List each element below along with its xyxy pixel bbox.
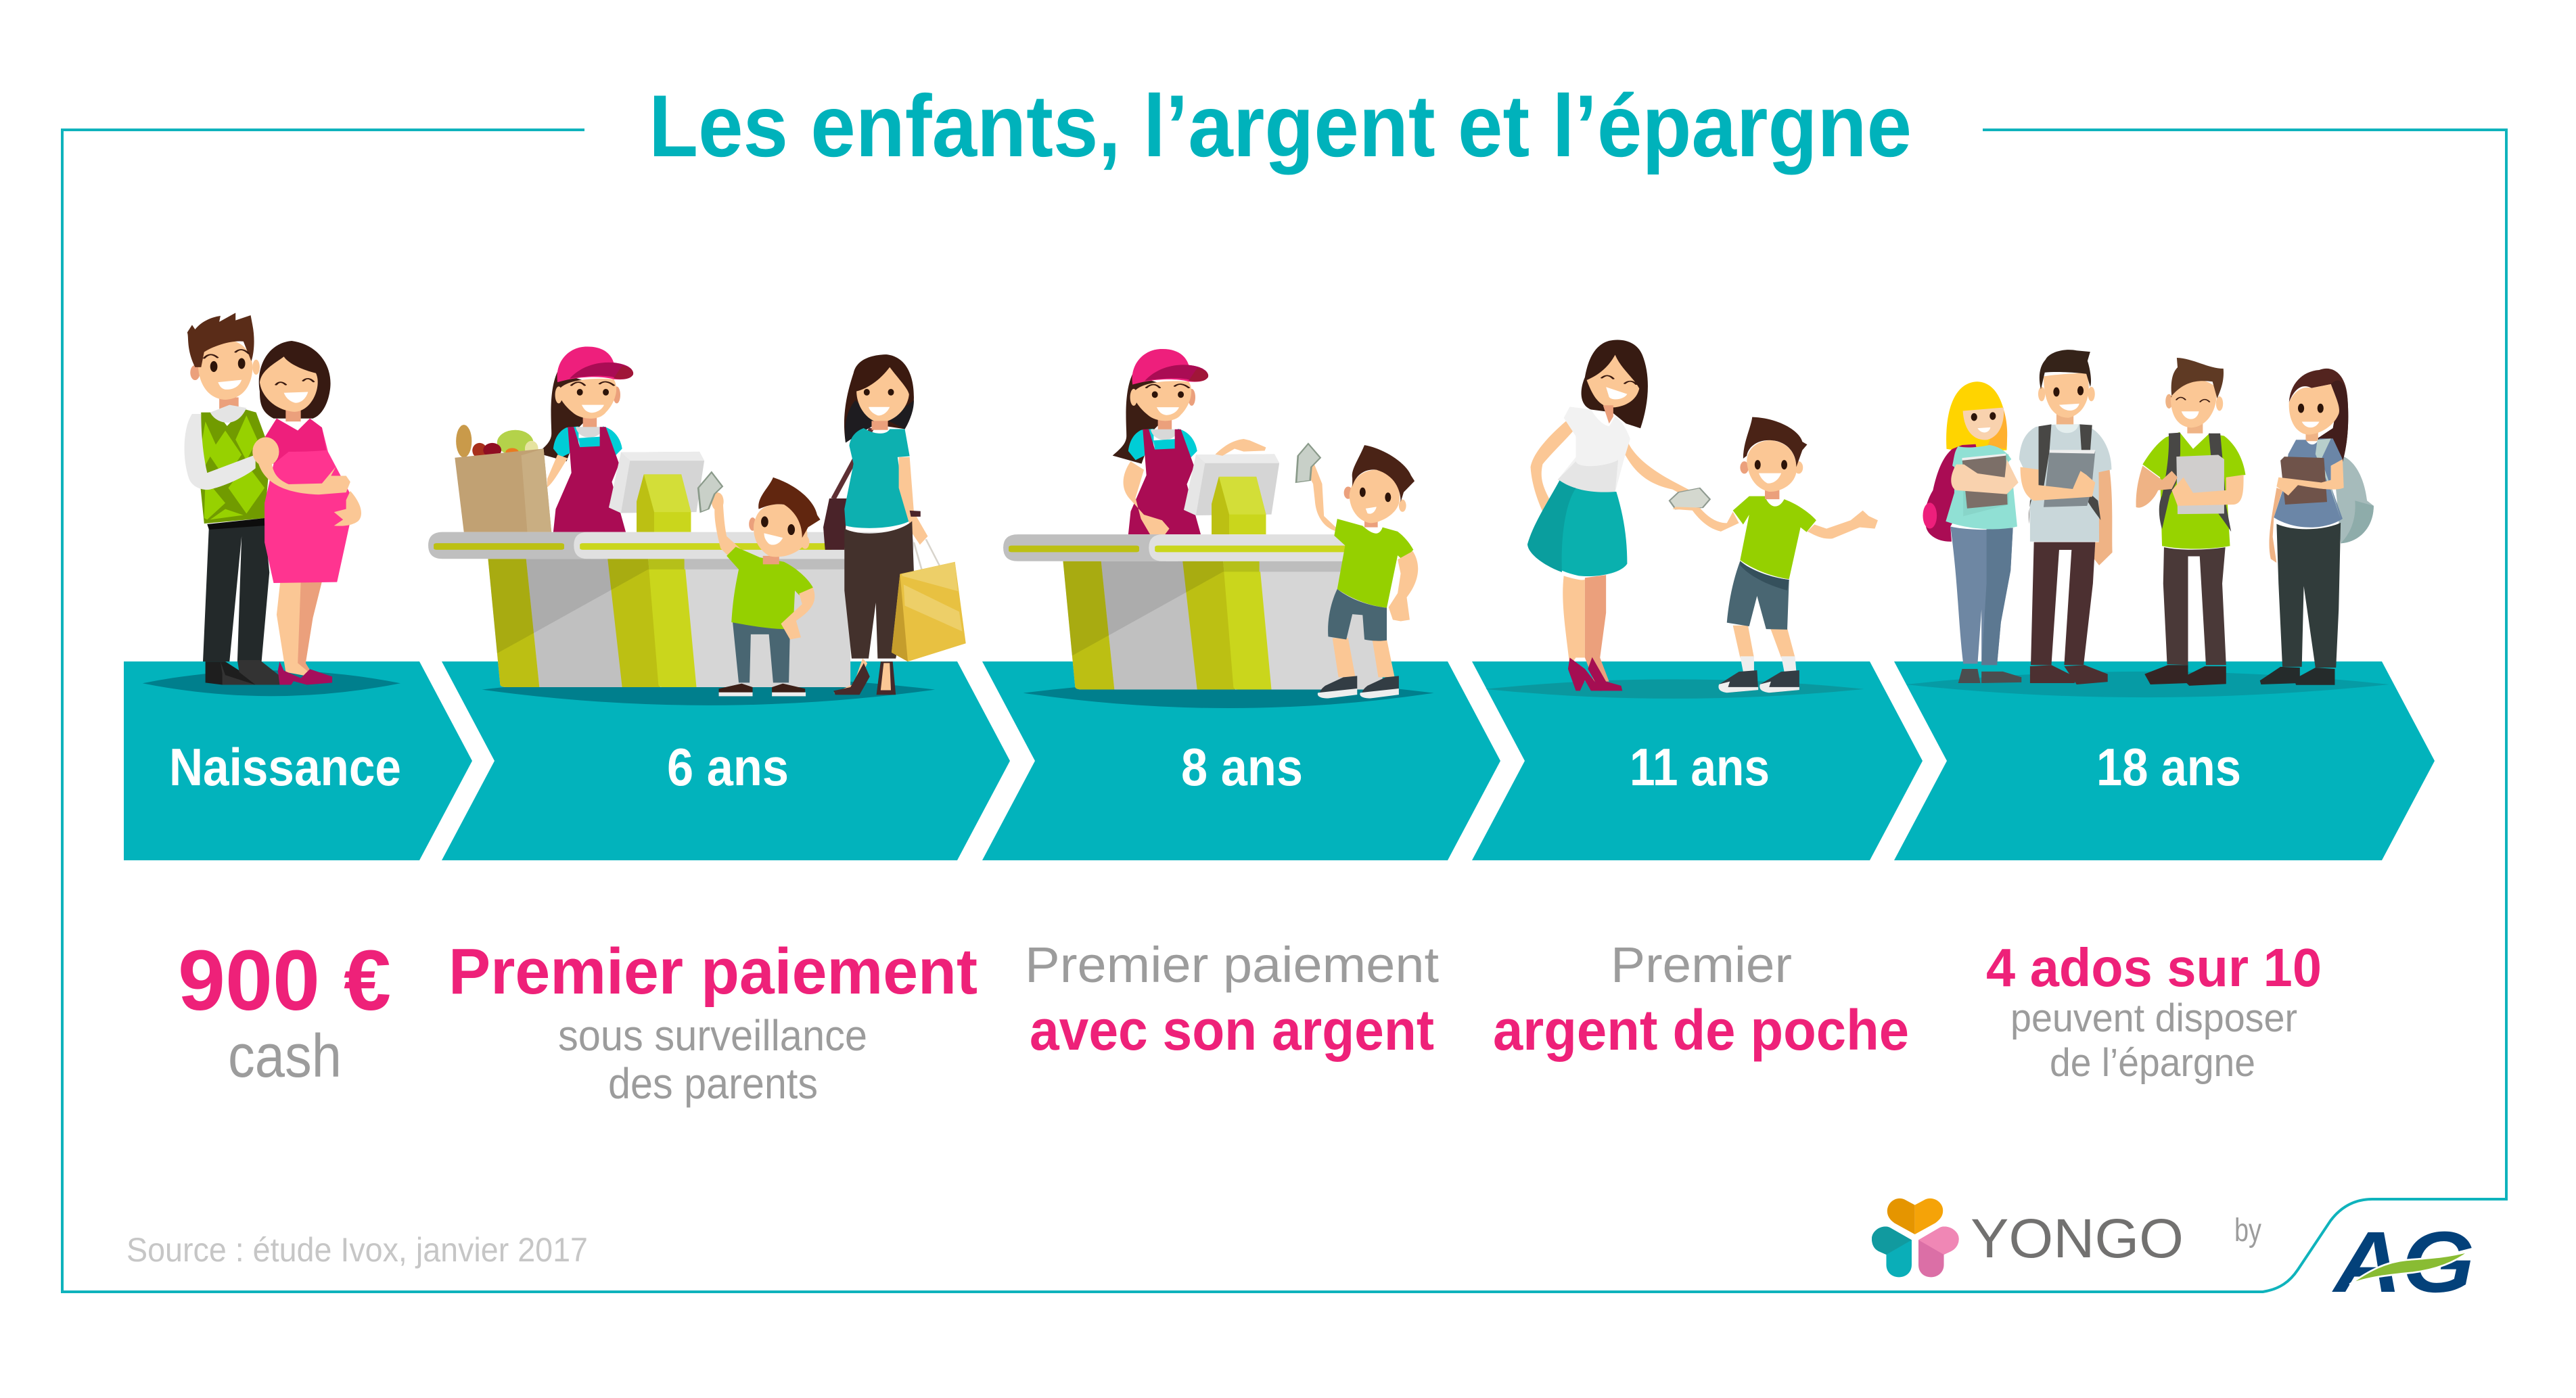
chevron: 18 ans: 18 ans xyxy=(2096,737,2241,797)
caption: 11 ans: argent de poche xyxy=(1493,998,1909,1062)
timeline chevrons xyxy=(124,661,2435,860)
caption: Naissance: cash xyxy=(228,1023,342,1090)
caption: 8 ans: Premier paiement xyxy=(1025,937,1439,993)
caption: 11 ans: Premier xyxy=(1611,937,1792,993)
boy with banknotes xyxy=(1296,444,1418,699)
cashier xyxy=(538,346,633,532)
shadow xyxy=(1024,680,1434,708)
by label: by xyxy=(2234,1213,2261,1249)
boy in green shirt xyxy=(2136,358,2245,686)
banknotes handed over xyxy=(1670,488,1710,509)
caption: 6 ans xyxy=(448,935,978,1108)
caption: Naissance xyxy=(178,933,391,1090)
illustration: 18 ans teens with books xyxy=(1906,350,2389,697)
chevron: 6 ans: 6 ans xyxy=(667,737,789,797)
blond girl xyxy=(1923,381,2021,683)
illustration: expecting couple xyxy=(143,312,400,696)
chevron: 8 ans: 8 ans xyxy=(1181,737,1303,797)
caption: 6 ans: sous surveillance xyxy=(558,1011,867,1060)
icon: Yongo petals xyxy=(1872,1198,1959,1277)
caption: 18 ans: de l’épargne xyxy=(2050,1041,2255,1085)
chevron: 11 ans xyxy=(1472,661,1923,860)
cashier arms xyxy=(1124,439,1266,534)
boy receiving money xyxy=(1672,417,1878,693)
grocery bag xyxy=(455,425,551,532)
girl with backpack xyxy=(2260,369,2374,685)
checkout counter xyxy=(428,532,914,687)
boy with money xyxy=(698,472,821,696)
chevron: Naissance xyxy=(124,661,472,860)
man xyxy=(185,312,283,684)
title: Les enfants, l’argent et l’épargne xyxy=(649,76,1912,175)
chevron: Naissance: Naissance xyxy=(169,737,401,797)
caption: Naissance: 900 € xyxy=(178,933,391,1028)
caption: 18 ans: 4 ados sur 10 xyxy=(1986,937,2322,998)
illustration: 8 ans checkout scene xyxy=(1003,349,1434,708)
cashier, register and counter xyxy=(1003,349,1418,698)
chevron: 6 ans xyxy=(442,661,1010,860)
source note: Source : étude Ivox, janvier 2017 xyxy=(127,1231,588,1269)
logo: AG: AG xyxy=(2332,1214,2475,1311)
caption: 18 ans: peuvent disposer xyxy=(2010,996,2297,1040)
illustration: 6 ans checkout scene xyxy=(428,346,966,705)
logo: Yongo xyxy=(1872,1198,2184,1277)
cash register xyxy=(609,452,704,532)
chevron: 8 ans xyxy=(982,661,1500,860)
caption: 6 ans: Premier paiement xyxy=(448,935,978,1008)
frame border xyxy=(62,130,2506,1292)
illustration: 11 ans pocket money xyxy=(1486,340,1878,699)
caption: 8 ans xyxy=(1025,937,1439,1062)
mother in teal skirt xyxy=(1527,340,1694,691)
mother with bags xyxy=(823,354,966,695)
icon: green leaf xyxy=(2349,1251,2470,1284)
logo: Yongo: YONGO xyxy=(1971,1208,2184,1269)
chevron: 11 ans: 11 ans xyxy=(1630,737,1770,797)
caption: 6 ans: des parents xyxy=(608,1059,818,1108)
caption: 18 ans xyxy=(1986,937,2322,1085)
chevron: 18 ans xyxy=(1894,661,2435,860)
pregnant woman xyxy=(252,341,361,684)
caption: 11 ans xyxy=(1493,937,1909,1062)
caption: 8 ans: avec son argent xyxy=(1030,998,1434,1062)
boy with gray book xyxy=(2019,350,2113,684)
